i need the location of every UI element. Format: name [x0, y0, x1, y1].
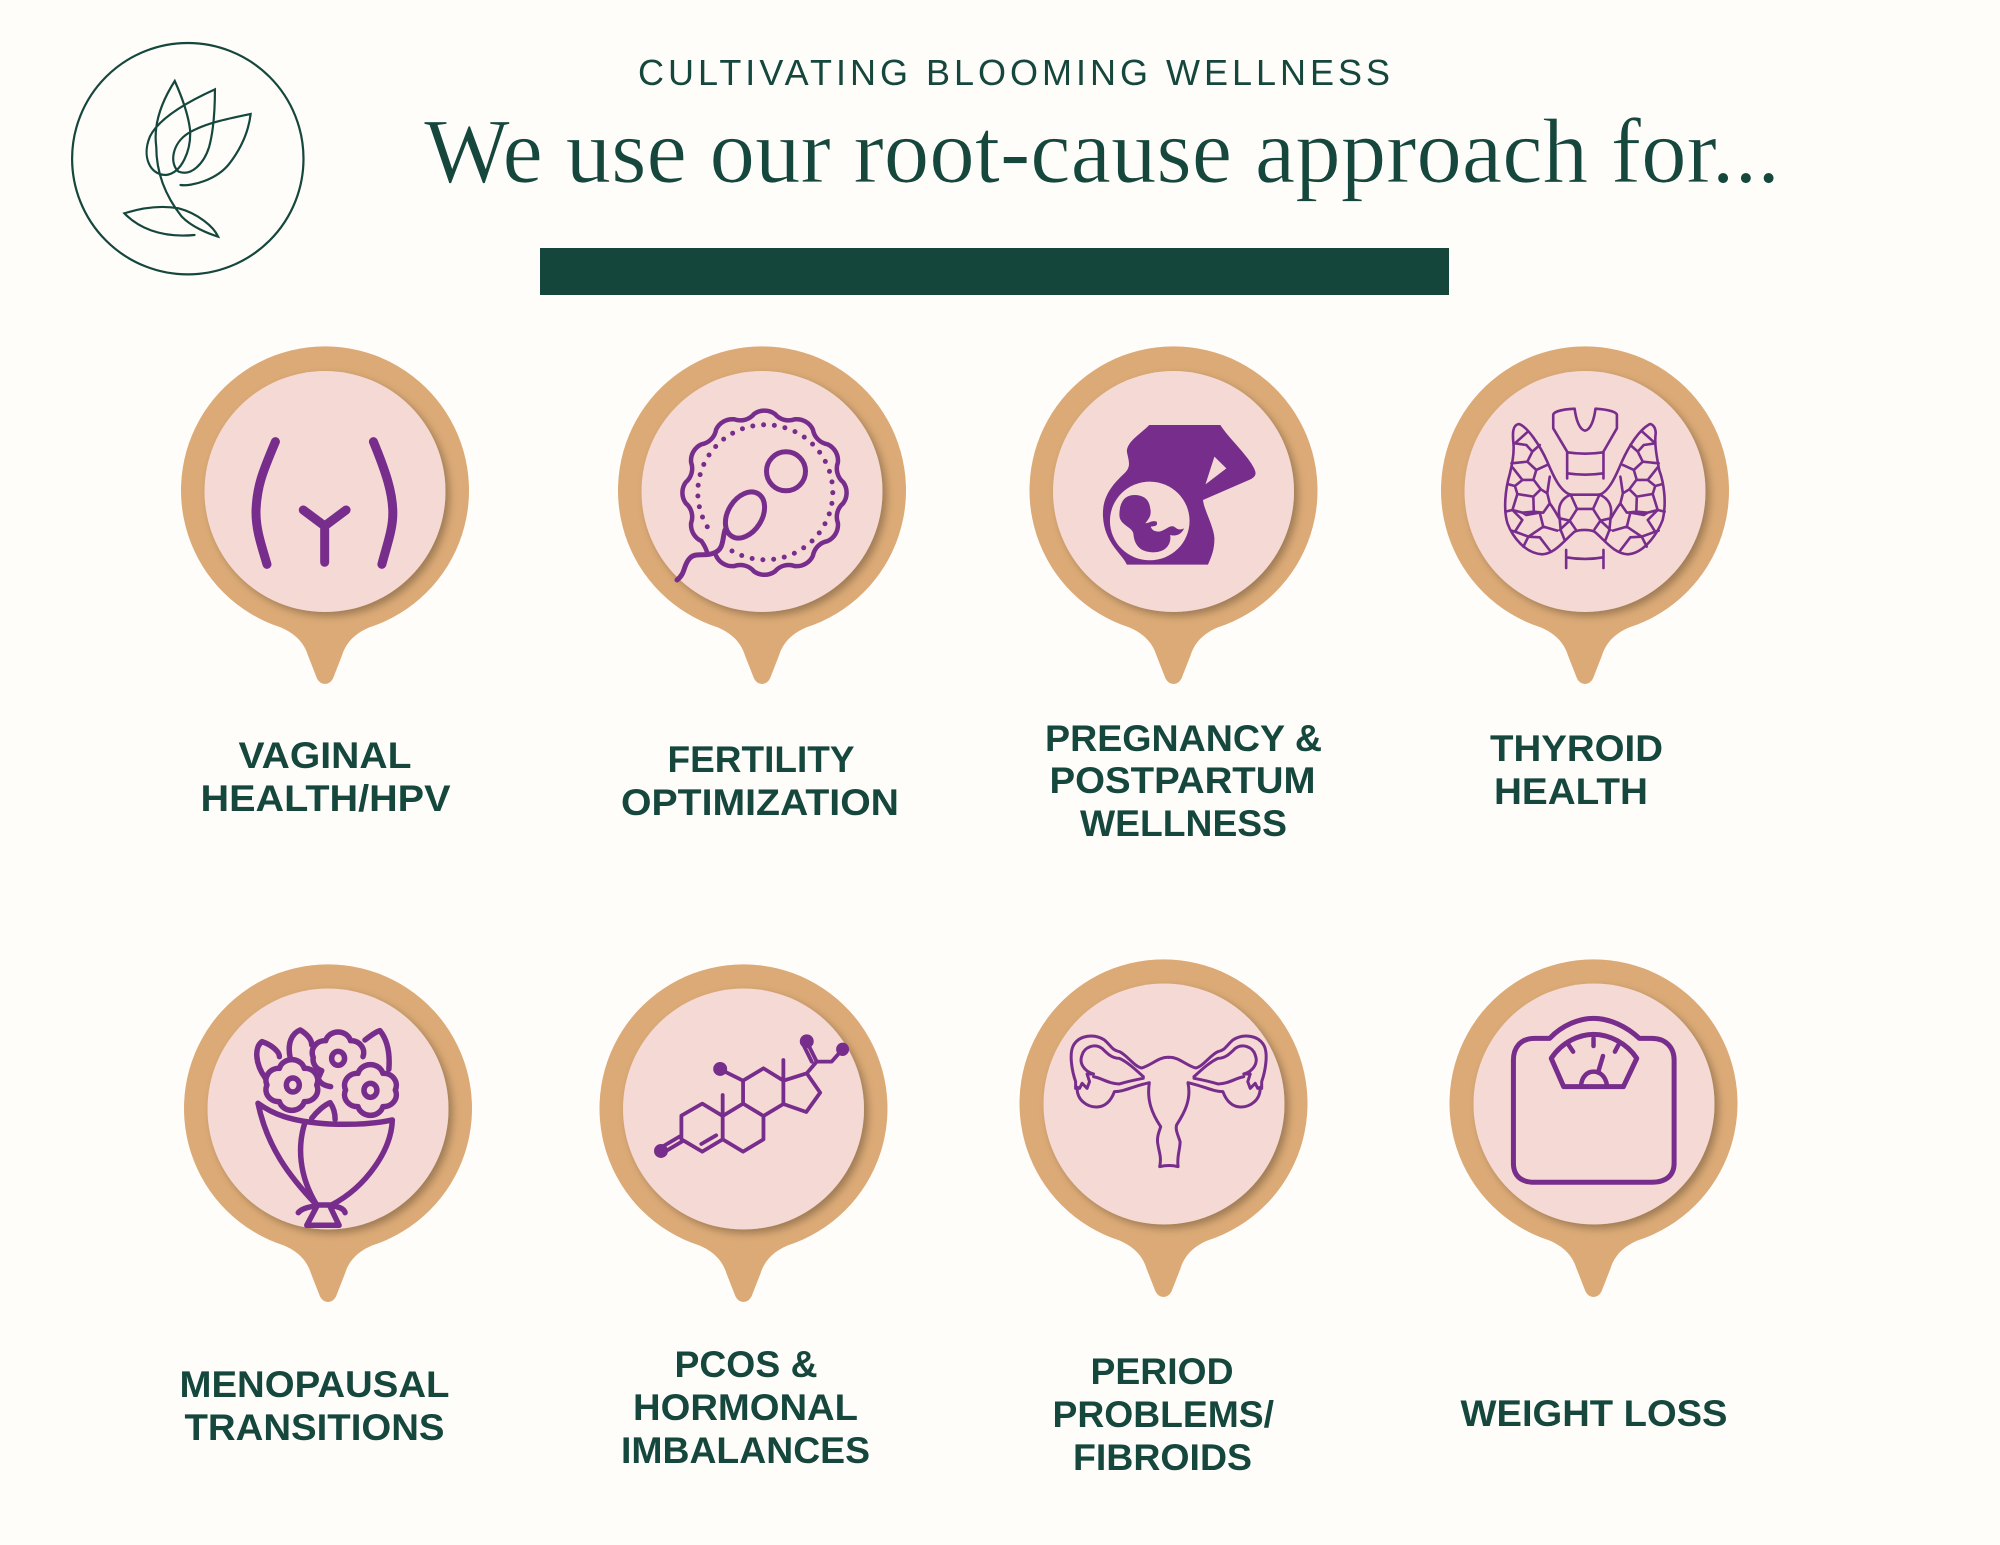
- label: thyroid: HEALTH: [1494, 771, 1648, 812]
- icon: steroid molecule: [654, 1034, 849, 1158]
- label: weight loss: WEIGHT LOSS: [1460, 1393, 1728, 1434]
- icon: bouquet: [257, 1030, 396, 1225]
- icon: thyroid gland: [1505, 409, 1665, 568]
- pin: thyroid: [1441, 346, 1729, 684]
- label: period problems: FIBROIDS: [1073, 1437, 1252, 1478]
- title: We use our root-cause approach for...: [424, 100, 1780, 202]
- label: menopausal: [180, 1364, 450, 1448]
- eyebrow heading: CULTIVATING BLOOMING WELLNESS: [638, 52, 1390, 93]
- label: PCOS: HORMONAL: [633, 1387, 858, 1428]
- label: pregnancy: PREGNANCY &: [1045, 718, 1322, 759]
- icon: hips outline: [256, 442, 393, 564]
- label: vaginal health: VAGINAL: [238, 735, 412, 776]
- pin: pregnancy: [1030, 346, 1318, 684]
- label: thyroid: THYROID: [1490, 728, 1663, 769]
- label: pregnancy: POSTPARTUM: [1050, 760, 1316, 801]
- icon: bathroom scale: [1513, 1018, 1674, 1182]
- label: period problems: PERIOD: [1090, 1351, 1234, 1392]
- icon: pregnant silhouette with fetus: [1103, 425, 1256, 565]
- label: thyroid: [1490, 728, 1663, 812]
- label: period problems: [1052, 1351, 1274, 1478]
- label: fertility: OPTIMIZATION: [621, 782, 899, 823]
- pin: fertility: [618, 346, 906, 684]
- pin: vaginal health: [181, 346, 469, 684]
- icon: egg and sperm: [677, 411, 847, 580]
- label: PCOS: [621, 1344, 870, 1471]
- logo: flower in circle: [72, 43, 304, 274]
- pin: weight loss: [1450, 959, 1738, 1297]
- label: pregnancy: WELLNESS: [1080, 803, 1287, 844]
- icon: uterus: [1071, 1036, 1266, 1167]
- label: PCOS: PCOS &: [674, 1344, 818, 1385]
- label: fertility: [621, 739, 899, 823]
- label: menopausal: MENOPAUSAL: [180, 1364, 450, 1405]
- label: pregnancy: [1045, 718, 1322, 844]
- pin: period problems: [1020, 959, 1308, 1297]
- label: menopausal: TRANSITIONS: [184, 1407, 444, 1448]
- pin: menopausal: [184, 964, 472, 1302]
- label: period problems: PROBLEMS/: [1052, 1394, 1274, 1435]
- pin: PCOS: [600, 964, 888, 1302]
- title bar: [540, 248, 1449, 295]
- label: PCOS: IMBALANCES: [621, 1430, 870, 1471]
- label: vaginal health: [200, 735, 451, 819]
- label: fertility: FERTILITY: [668, 739, 855, 780]
- label: vaginal health: HEALTH/HPV: [200, 778, 451, 819]
